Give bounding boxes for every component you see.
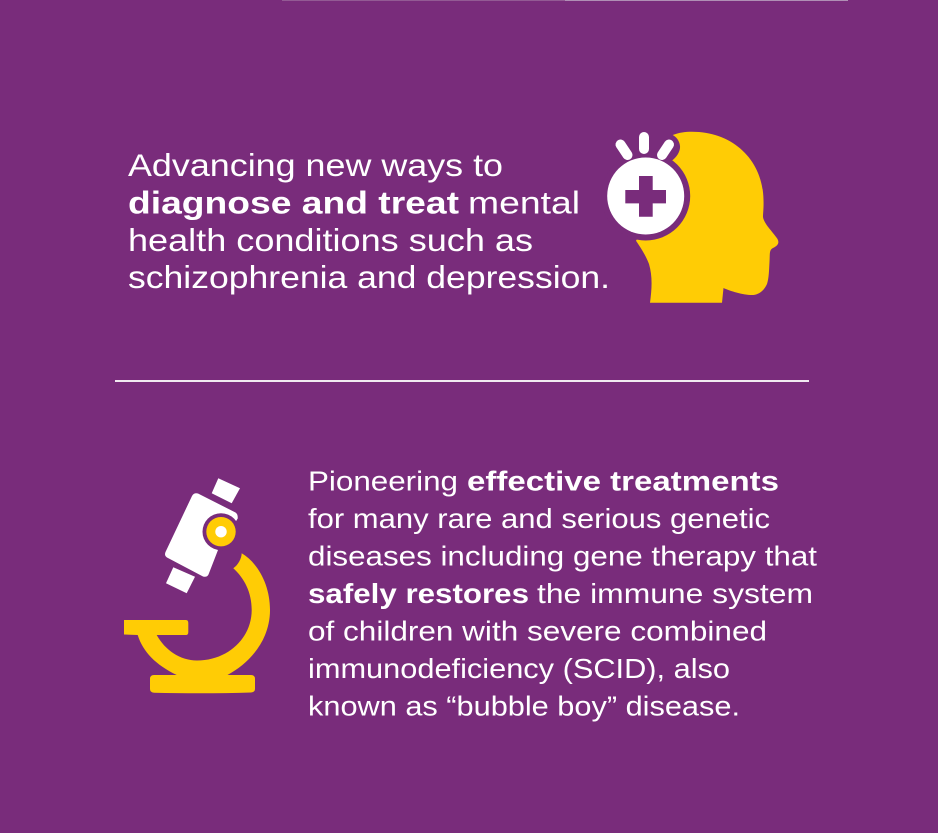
text block: diagnose and treat (128, 147, 610, 295)
purple ring around circle (601, 152, 690, 240)
head silhouette (636, 132, 778, 303)
microscope body (165, 493, 238, 577)
text block: effective treatments: Pioneering (308, 466, 458, 496)
eyepiece (212, 478, 240, 503)
text block: diagnose and treat: diagnose and treat (128, 184, 460, 220)
text block: effective treatments: immunodeficiency (SCID), also (308, 653, 730, 684)
text block: effective treatments (308, 466, 817, 722)
text block: effective treatments: of children with severe combined (308, 616, 767, 646)
icon: head with medical cross (601, 132, 778, 303)
text block: effective treatments: known as “bubble boy” disease. (308, 690, 740, 722)
text block: effective treatments: effective treatments (467, 466, 779, 496)
text block: diagnose and treat: mental (468, 184, 580, 220)
icon: microscope (124, 478, 270, 693)
arm and base (124, 553, 270, 693)
white circle (607, 158, 684, 234)
text block: effective treatments: diseases including gene therapy that (308, 540, 817, 572)
text block: effective treatments: for many rare and serious genetic (308, 503, 770, 534)
objective (166, 567, 195, 593)
text block: diagnose and treat: health conditions such as (128, 222, 533, 258)
medical cross (625, 176, 666, 217)
text block: effective treatments: the immune system (537, 578, 813, 609)
rays (620, 137, 669, 155)
divider (115, 380, 809, 382)
text block: diagnose and treat: Advancing new ways to (128, 147, 503, 183)
focus knob (202, 513, 240, 550)
text block: effective treatments: safely restores (308, 578, 529, 609)
text block: diagnose and treat: schizophrenia and depression. (128, 259, 610, 295)
